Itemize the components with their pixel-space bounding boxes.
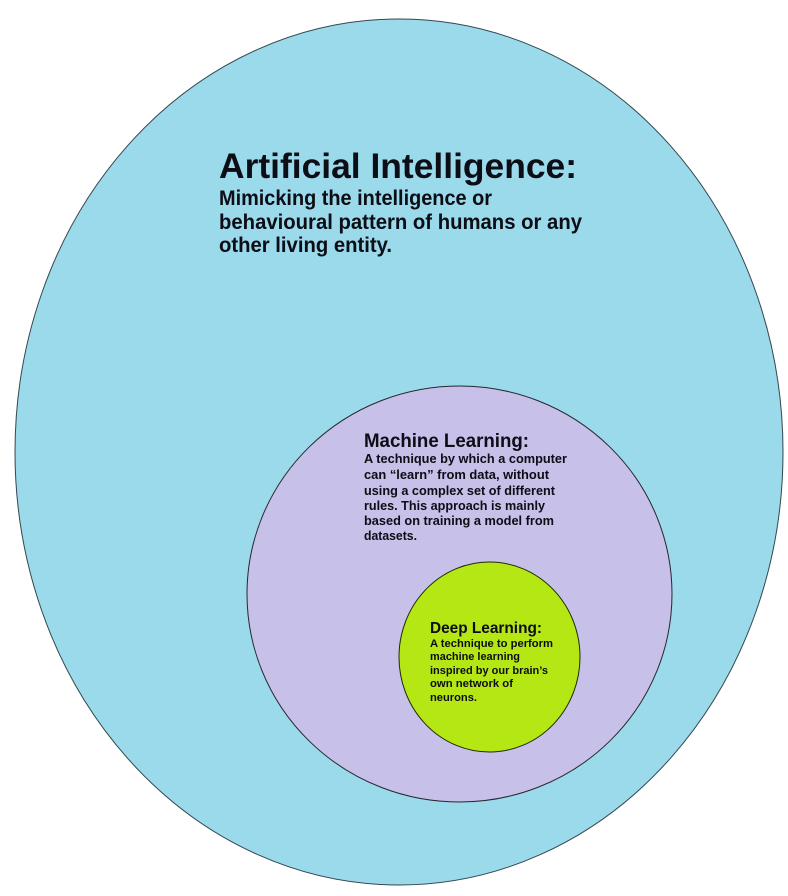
- text block: deep learning description: own network of: [430, 678, 513, 690]
- text block: deep learning description: machine learning: [430, 651, 520, 663]
- text block: machine learning description: [364, 452, 567, 543]
- heading: machine learning: Machine Learning:: [364, 431, 529, 452]
- text block: deep learning description: inspired by our brain’s: [430, 665, 548, 677]
- text block: deep learning description: A technique to perform: [430, 638, 553, 650]
- heading: artificial intelligence: Artificial Intelligence:: [219, 147, 577, 186]
- text block: machine learning description: datasets.: [364, 529, 417, 543]
- text block: artificial intelligence description: other living entity.: [219, 234, 392, 257]
- panel: deep learning circle: [399, 562, 580, 752]
- text block: machine learning description: A technique by which a computer: [364, 452, 567, 466]
- text block: artificial intelligence description: Mimicking the intelligence or: [219, 187, 492, 210]
- text block: machine learning description: can “learn” from data, without: [364, 468, 550, 482]
- panel: machine learning circle: [247, 386, 672, 802]
- text block: artificial intelligence description: behavioural pattern of humans or any: [219, 211, 582, 234]
- text block: deep learning description: [430, 638, 553, 704]
- text block: machine learning description: based on training a model from: [364, 514, 554, 528]
- text block: deep learning description: neurons.: [430, 692, 477, 704]
- text block: artificial intelligence description: [219, 187, 582, 257]
- heading: deep learning: Deep Learning:: [430, 620, 542, 637]
- text block: machine learning description: rules. This approach is mainly: [364, 499, 545, 513]
- text block: machine learning description: using a complex set of different: [364, 484, 556, 498]
